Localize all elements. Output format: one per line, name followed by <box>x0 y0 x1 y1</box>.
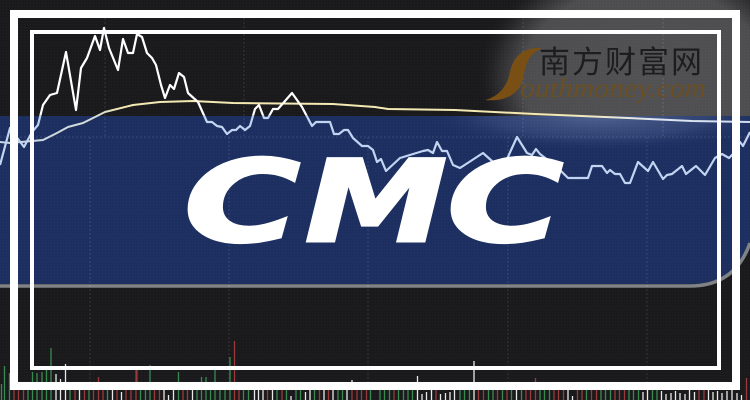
price line <box>0 28 750 183</box>
title: CMC <box>184 136 563 268</box>
logo swoosh <box>485 48 542 100</box>
green volume bars <box>2 348 657 400</box>
top right grey glow <box>440 0 750 116</box>
logo chinese name: 南方财富网 <box>539 45 702 80</box>
logo url: outhmoney.com <box>520 73 706 103</box>
moving average line <box>0 101 750 143</box>
logo: southmoney <box>485 45 706 103</box>
inner white frame <box>32 32 719 368</box>
red volume bars <box>14 341 746 400</box>
white volume bars <box>56 361 742 400</box>
title: CMC: C <box>447 136 563 268</box>
title: CMC: M <box>305 136 447 268</box>
title: CMC: C <box>184 136 300 268</box>
volume bars <box>2 341 746 400</box>
blue panel <box>0 116 750 286</box>
